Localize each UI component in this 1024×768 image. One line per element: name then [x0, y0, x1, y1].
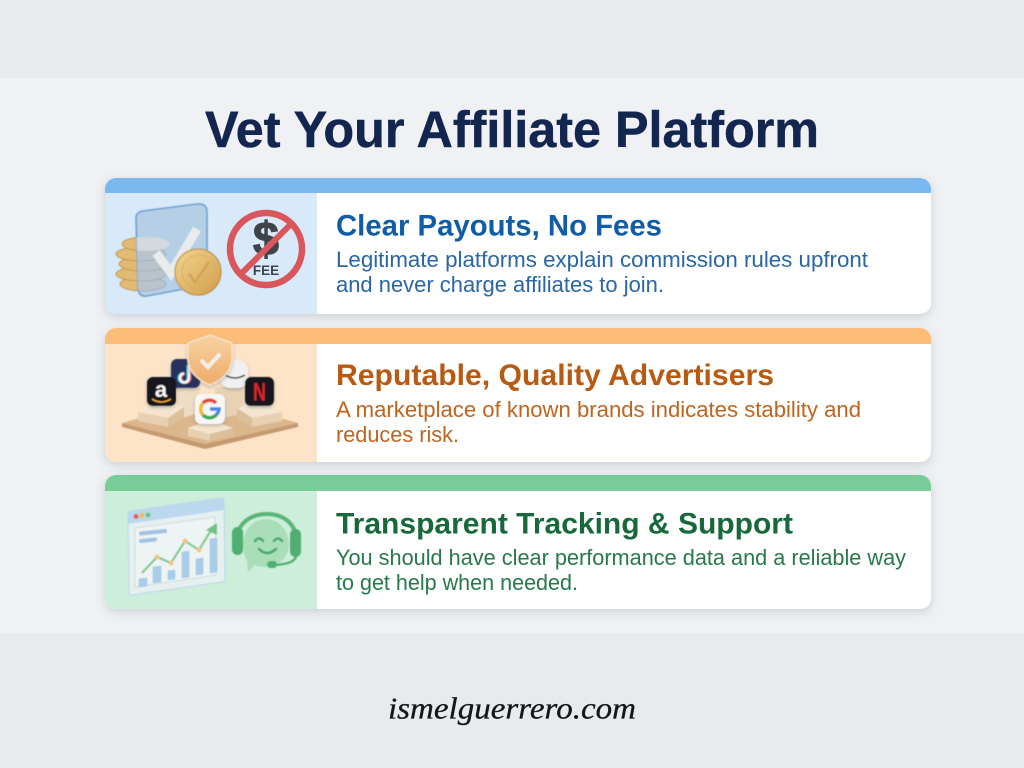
heading: clear payouts: Clear Payouts, No Fees: [336, 210, 662, 242]
icon: no fee sign: FEE: [253, 263, 279, 278]
icon: amazon tile: [147, 377, 176, 406]
text: clear payouts description: [336, 247, 868, 297]
icon: brand marketplace platform: [122, 335, 298, 449]
text: clear payouts description: Legitimate platforms explain commission rules upfront: [336, 247, 868, 272]
icon: no fee sign: $: [253, 212, 279, 265]
panel: clear payouts: [105, 178, 931, 314]
icon: support chat bubble with headset: [232, 514, 301, 573]
icon: amazon white tile: [220, 360, 248, 388]
icon: google tile: [195, 394, 225, 424]
text: reputable advertisers description: [336, 397, 861, 447]
text: tracking and support description: [336, 545, 906, 595]
icon: no fee sign: [230, 212, 302, 285]
icon: netflix tile: N: [253, 378, 266, 406]
panel: reputable advertisers: [105, 328, 931, 462]
icon: tiktok tile: [171, 359, 200, 388]
text: clear payouts description: and never charge affiliates to join.: [336, 272, 664, 297]
footer: website: ismelguerrero.com: [388, 690, 636, 726]
panel: tracking and support: [105, 475, 931, 609]
heading: reputable advertisers: Reputable, Quality Advertisers: [336, 359, 774, 392]
icon: shield with check: [188, 335, 232, 385]
icon: amazon tile: a: [155, 377, 168, 402]
icon: coins behind glass with check: [116, 204, 221, 296]
text: tracking and support description: You should have clear performance data and a reliable way: [336, 545, 906, 570]
text: reputable advertisers description: reduces risk.: [336, 422, 459, 447]
icon: analytics dashboard window: [128, 498, 225, 595]
text: tracking and support description: to get help when needed.: [336, 570, 578, 595]
title: Vet Your Affiliate Platform: [205, 101, 819, 158]
icon: netflix tile: [245, 377, 274, 406]
heading: tracking and support: Transparent Tracking & Support: [336, 508, 793, 540]
text: reputable advertisers description: A marketplace of known brands indicates stability and: [336, 397, 861, 422]
